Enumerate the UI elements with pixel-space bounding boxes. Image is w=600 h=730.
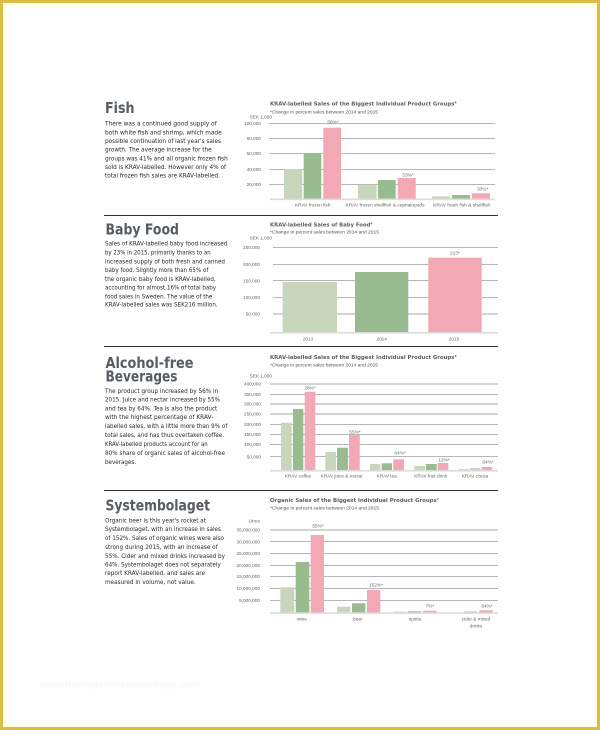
text block: systembolaget: of 152%. Sales of organic wines were also	[105, 536, 224, 542]
y axis labels	[244, 114, 272, 187]
text block: systembolaget: Systembolaget, with an increase in sales	[105, 527, 221, 533]
category labels: KRAV coffee	[285, 474, 312, 479]
chart title: KRAV-labelled Sales of the Biggest Individual Product Groups⁴	[270, 354, 457, 361]
y axis labels: 50,000	[246, 312, 260, 317]
text block: alcohol-free beverages: KRAV-labelled products account for an	[105, 442, 208, 448]
value labels: 64%*	[481, 604, 493, 609]
text block: alcohol-free beverages: total sales, and has thus overtaken coffee.	[105, 433, 224, 439]
divider	[104, 490, 498, 491]
category labels	[295, 203, 491, 208]
bars: KRAV fresh fish and shellfish	[432, 193, 490, 199]
text block: systembolaget: strong during 2015, with an increase of	[105, 545, 219, 551]
heading: alcohol-free beverages: Beverages	[106, 368, 178, 386]
y axis labels	[237, 518, 261, 603]
category labels	[303, 337, 460, 342]
text block: baby food: by 23% in 2015, primarily thanks to an	[105, 250, 211, 256]
text block: alcohol-free beverages	[104, 389, 228, 466]
value labels: 64%*	[482, 460, 494, 465]
value labels: 12%*	[438, 457, 450, 462]
bars: KRAV fruit drink	[414, 463, 448, 471]
category labels: KRAV juice & nectar	[321, 474, 363, 479]
bars: beer	[337, 590, 380, 613]
divider	[104, 215, 498, 216]
category labels: 2014	[376, 337, 387, 342]
chart title: KRAV-labelled Sales of Baby Food⁴	[270, 221, 373, 228]
y axis labels: 150,000	[244, 432, 261, 437]
bars: KRAV frozen shellfish and cephalopods	[358, 178, 416, 199]
y axis labels: SEK 1,000	[250, 235, 272, 240]
category labels	[297, 617, 491, 629]
value labels: 7%*	[426, 604, 434, 609]
divider	[104, 346, 498, 347]
y axis labels: 350,000	[244, 392, 261, 397]
y axis labels	[244, 373, 272, 459]
category labels: cider & mixed	[462, 617, 491, 622]
text block: fish: sold is KRAV-labelled. However only 4% of	[105, 165, 227, 171]
y axis labels: 250,000	[244, 412, 261, 417]
text block: fish: both white fish and shrimp, which made	[105, 130, 222, 136]
value labels: 28%*	[304, 385, 316, 390]
category labels	[285, 474, 489, 479]
y axis labels: 100,000	[243, 295, 260, 300]
y axis labels: Litres	[249, 518, 261, 523]
bars: KRAV tea	[370, 459, 404, 471]
category labels: spirits	[409, 617, 422, 622]
category labels: 2013	[303, 337, 314, 342]
heading: alcohol-free beverages: Alcohol-free	[106, 354, 194, 372]
text block: systembolaget: report KRAV-labelled, and sales are	[105, 571, 205, 577]
bars: 2013 to 2015	[283, 258, 482, 332]
text block: baby food	[105, 242, 228, 308]
category labels: KRAV frozen fish	[295, 203, 331, 208]
value label: 213*	[450, 251, 460, 256]
text block: alcohol-free beverages: and tea by 64%. Tea is also the product	[105, 406, 218, 412]
bar chart: fish	[244, 100, 495, 208]
bar chart: alcohol-free beverages	[244, 354, 498, 479]
text block: alcohol-free beverages: The product group increased by 56% in	[104, 389, 219, 395]
chart subtitle: *Change in percent sales between 2014 and 2015	[270, 363, 378, 368]
y axis labels: 50,000	[247, 454, 261, 459]
y axis labels: 5,000,000	[239, 598, 260, 603]
text block: fish: groups was 41% and all organic frozen fish	[105, 156, 228, 162]
text block: baby food: KRAV-labelled sales was SEK216 million.	[105, 302, 218, 308]
text block: fish: There was a continued good supply of	[104, 122, 218, 128]
y axis labels: 100,000	[244, 442, 261, 447]
y axis labels: 35,000,000	[237, 528, 260, 533]
panel: alcohol-free beverages	[104, 354, 498, 479]
value labels: 55%*	[349, 429, 361, 434]
heading: baby food: Baby Food	[106, 221, 179, 239]
category labels: 2015	[449, 337, 460, 342]
chart title: KRAV-labelled Sales of the Biggest Individual Product Groups⁴	[270, 100, 457, 107]
value labels	[327, 119, 488, 192]
y axis labels: 40,000	[247, 167, 261, 172]
watermark: www.heritagechristiancollege.com	[39, 679, 200, 689]
text block: systembolaget: 64%. Systembolaget does not separately	[105, 562, 221, 568]
value labels	[312, 523, 493, 609]
text block: fish: growth. The average increase for the	[105, 148, 212, 154]
text block: baby food: accounting for almost 16% of total baby	[105, 286, 217, 292]
value labels: 64%*	[394, 450, 406, 455]
y axis labels: 100,000	[244, 121, 261, 126]
category labels: KRAV fresh fish & shellfish	[433, 203, 491, 208]
chart subtitle: *Change in percent sales between 2014 and 2015	[270, 229, 379, 234]
chart subtitle: *Change in percent sales between 2014 and 2015	[270, 505, 379, 510]
y axis labels: 60,000	[247, 151, 261, 156]
bars: KRAV coffee	[281, 392, 315, 471]
category labels: drinks	[470, 624, 483, 629]
y axis labels: 300,000	[244, 402, 261, 407]
bars: wine	[280, 535, 324, 613]
value labels	[304, 385, 494, 465]
category labels: KRAV frozen shellfish & cephalopods	[346, 203, 425, 208]
y axis labels: 80,000	[247, 136, 261, 141]
text block: alcohol-free beverages: 80% share of organic sales of alcohol-free	[105, 451, 225, 457]
y axis labels: 20,000,000	[237, 563, 260, 568]
text block: systembolaget: 55%. Cider and mixed drinks increased by	[105, 554, 226, 560]
bar chart: systembolaget	[237, 497, 498, 629]
category labels: KRAV fruit drink	[414, 474, 448, 479]
value labels: 53%*	[402, 172, 414, 177]
y axis labels: SEK 1,000	[250, 114, 272, 119]
y axis labels: 10,000,000	[237, 586, 260, 591]
category labels: KRAV tea	[377, 474, 397, 479]
bar chart: baby food	[243, 221, 498, 342]
text block: fish: possible continuation of last year's sales	[105, 139, 221, 145]
y axis labels: 200,000	[244, 422, 261, 427]
text block: baby food: the organic baby food is KRAV-labelled,	[105, 277, 216, 283]
category labels: wine	[297, 617, 307, 622]
text block: baby food: Sales of KRAV-labelled baby food increased	[105, 242, 228, 248]
text block: fish	[104, 122, 228, 180]
text block: alcohol-free beverages: with the highest percentage of KRAV-	[105, 415, 213, 421]
y axis labels: 150,000	[243, 278, 260, 283]
panel: baby food	[105, 221, 498, 342]
value labels: 56%*	[327, 119, 339, 124]
panel: systembolaget	[105, 497, 498, 629]
value labels: 33%*	[477, 187, 488, 192]
text block: baby food: baby food. Slightly more than 65% of	[105, 268, 209, 274]
y axis labels: 25,000,000	[237, 551, 260, 556]
text block: systembolaget: measured in volume, not value.	[105, 580, 196, 586]
heading: systembolaget: Systembolaget	[106, 497, 210, 515]
bars: spirits	[393, 611, 437, 613]
text block: alcohol-free beverages: labelled sales, with a little more than 9% of	[105, 424, 228, 430]
bars: KRAV cocoa	[459, 467, 492, 471]
text block: systembolaget: Organic beer is this year's rocket at	[105, 518, 207, 524]
category labels: beer	[353, 617, 363, 622]
y axis labels: 200,000	[243, 262, 260, 267]
panel: fish	[104, 99, 495, 208]
text block: alcohol-free beverages: beverages.	[105, 460, 136, 466]
text block: baby food: food sales in Sweden. The value of the	[105, 294, 213, 300]
y axis labels: SEK 1,000	[250, 373, 272, 378]
text block: baby food: increased supply of both fresh and canned	[105, 260, 225, 266]
bars: KRAV frozen fish	[284, 128, 341, 199]
y axis labels: 15,000,000	[237, 574, 260, 579]
bars: cider and mixed drinks	[464, 610, 493, 613]
chart subtitle: *Change in percent sales between 2014 and 2015	[270, 109, 378, 114]
y axis labels: 400,000	[244, 382, 261, 387]
bars: KRAV juice and nectar	[325, 435, 360, 471]
heading: alcohol-free beverages	[106, 354, 194, 386]
category labels: KRAV cocoa	[462, 474, 489, 479]
text block: alcohol-free beverages: 2015. Juice and nectar increased by 55%	[105, 398, 220, 404]
chart title: Organic Sales of the Biggest Individual Product Groups⁷	[270, 497, 440, 504]
heading: fish: Fish	[105, 99, 134, 117]
y axis labels: 30,000,000	[237, 539, 260, 544]
value labels: 152%*	[369, 583, 383, 588]
y axis labels: 20,000	[247, 182, 261, 187]
value labels: 55%*	[312, 523, 324, 528]
text block: fish: total frozen fish sales are KRAV-labelled.	[105, 174, 220, 180]
y axis labels: 250,000	[243, 245, 260, 250]
y axis labels	[243, 235, 272, 317]
text block: systembolaget	[105, 518, 226, 586]
